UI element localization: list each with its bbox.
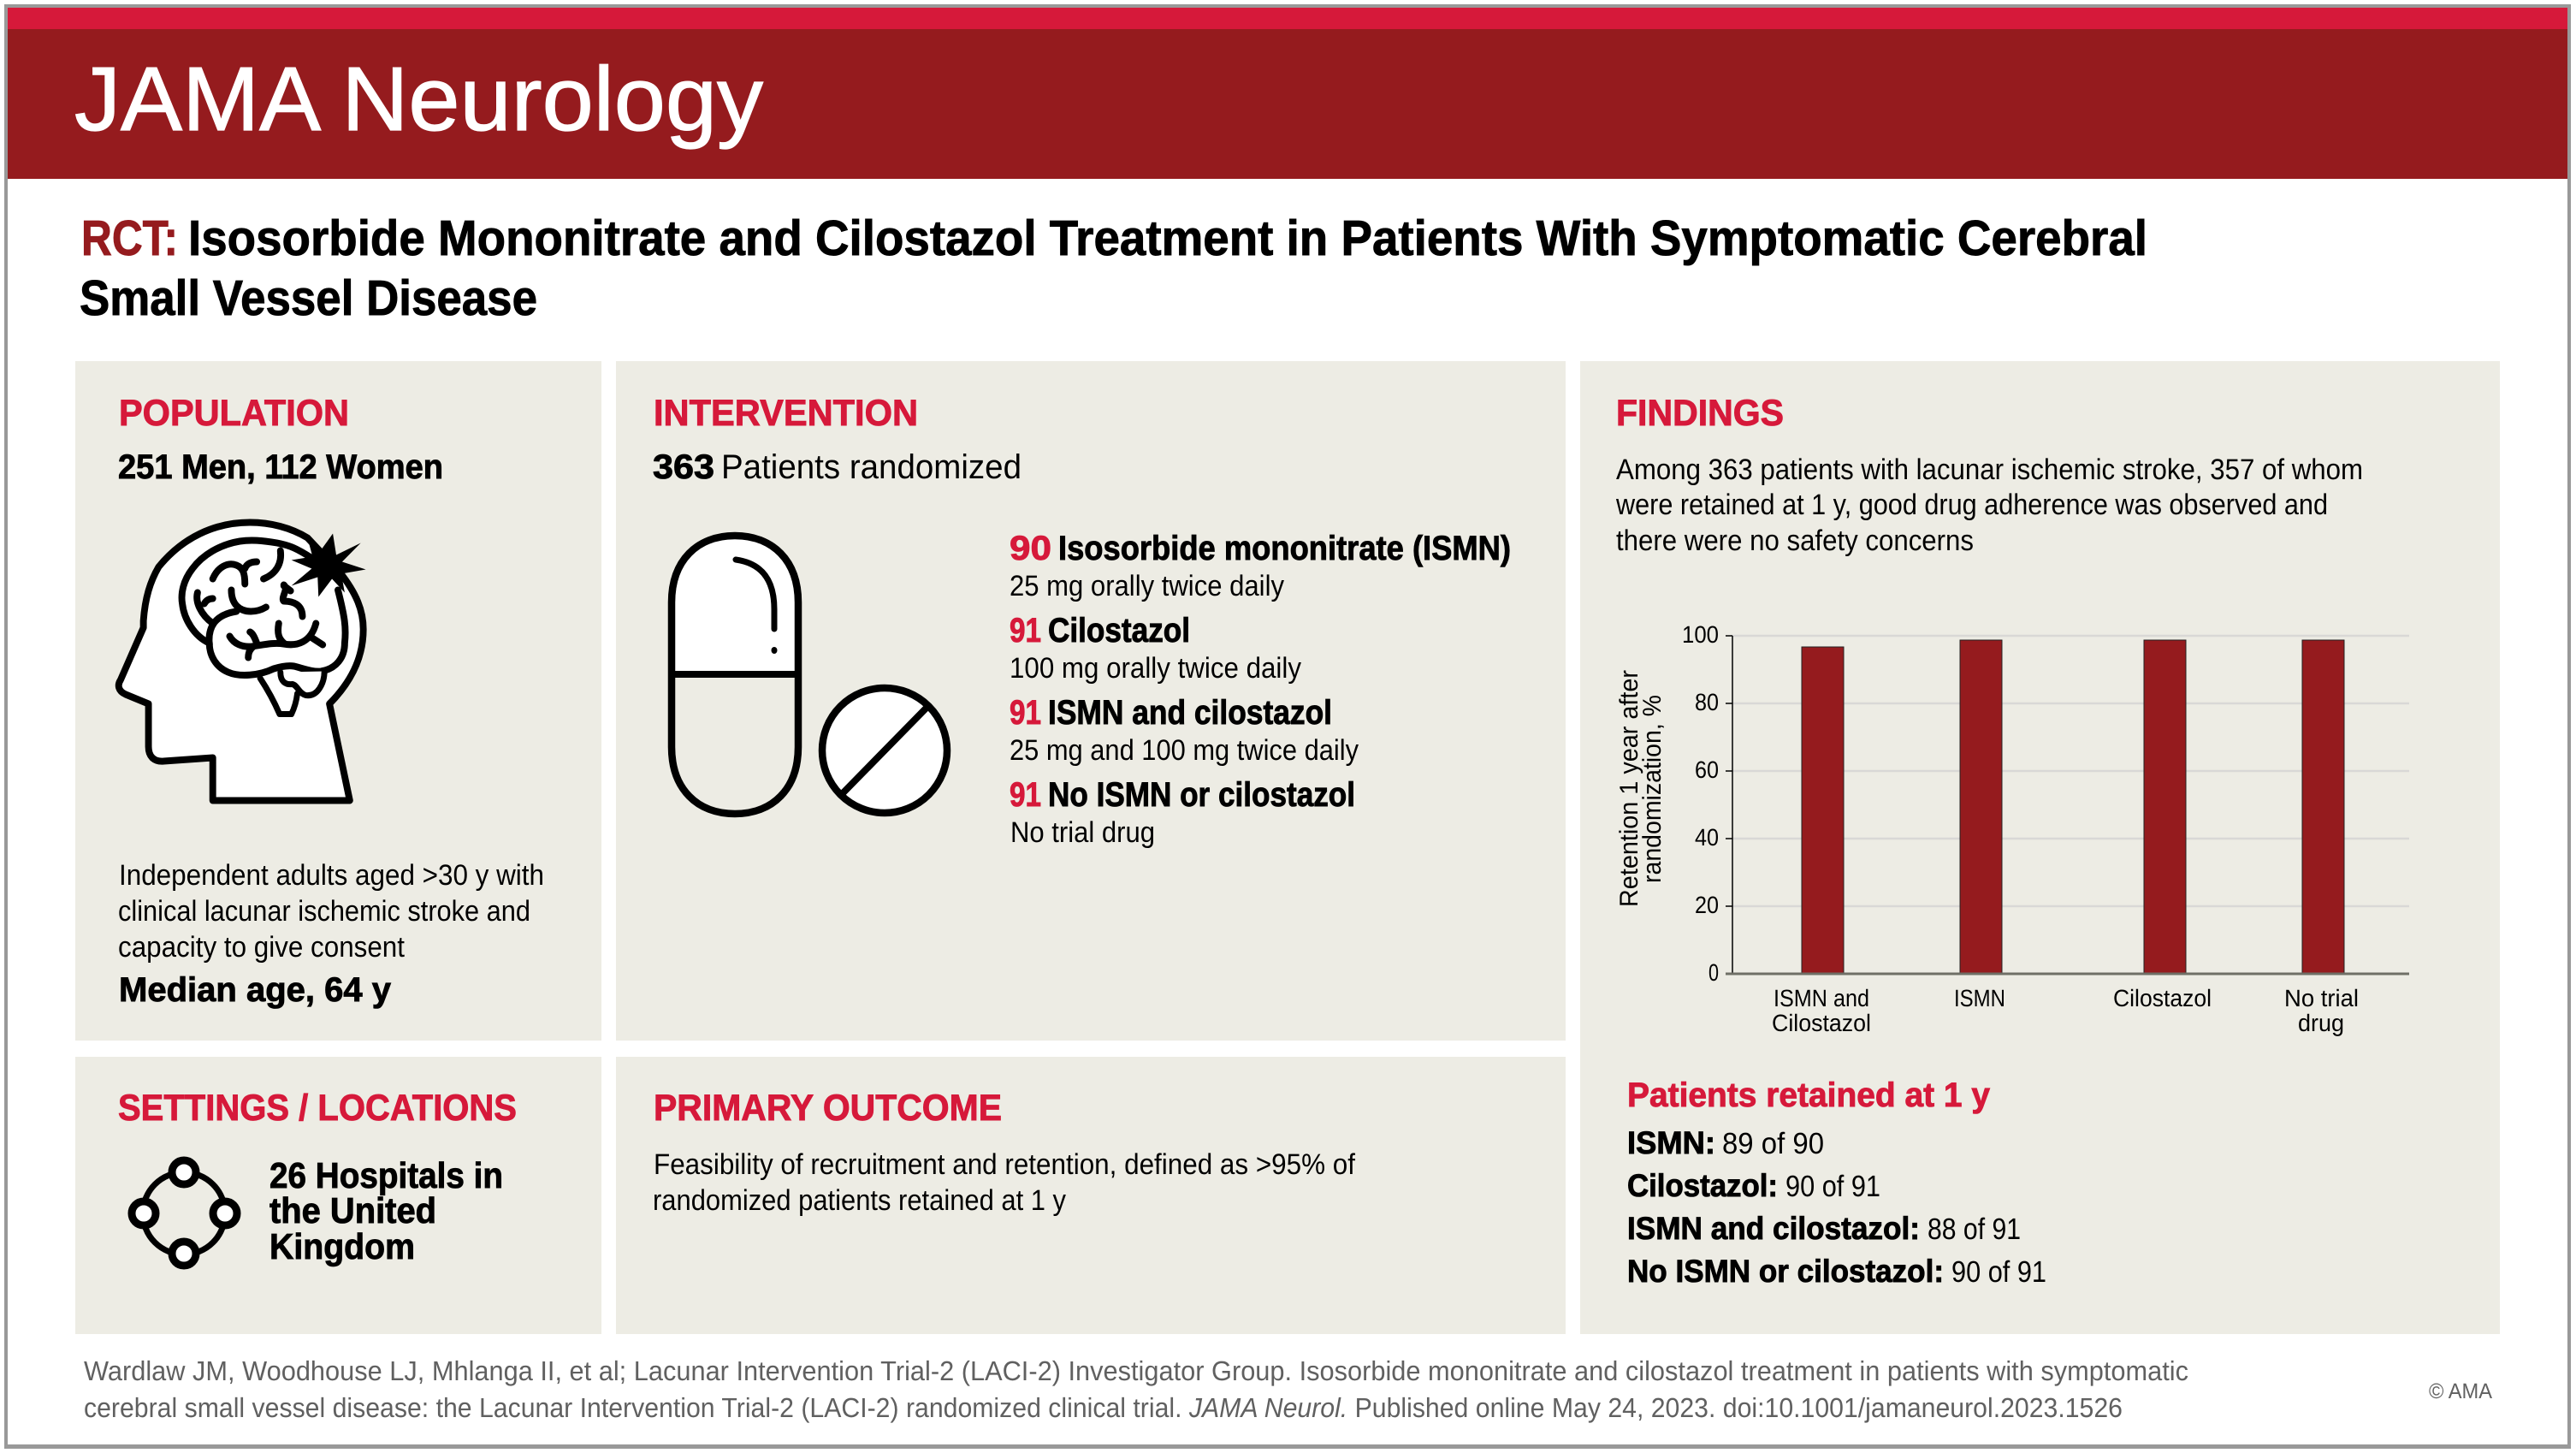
- population criteria: capacity to give consent: [118, 931, 405, 964]
- y axis title: Retention 1 year after: [1615, 670, 1643, 907]
- y axis ticks: 0: [1708, 959, 1719, 986]
- arm 3: ISMN and cilostazol: [1048, 694, 1332, 732]
- heading: primary outcome: PRIMARY OUTCOME: [654, 1088, 1002, 1129]
- x axis labels: No trial: [2284, 985, 2359, 1011]
- panel: settings and locations: [75, 1057, 601, 1334]
- y axis ticks: [1682, 621, 1719, 986]
- icon: network: [132, 1160, 237, 1266]
- y axis title: randomization, %: [1638, 695, 1667, 883]
- arm 4: 91: [1010, 776, 1041, 814]
- arm 1: Isosorbide mononitrate (ISMN): [1058, 530, 1511, 567]
- retained: ISMN and cilostazol: 88 of 91: [1928, 1213, 2021, 1246]
- arm 2: Cilostazol: [1048, 612, 1190, 649]
- heading: population: POPULATION: [119, 393, 349, 434]
- y axis ticks: 20: [1695, 892, 1719, 918]
- population criteria: clinical lacunar ischemic stroke and: [118, 895, 530, 928]
- arm 3: [1010, 694, 1359, 767]
- population criteria: Independent adults aged >30 y with: [119, 859, 544, 892]
- arm 2: [1010, 612, 1301, 685]
- randomized count: 363: [653, 448, 714, 486]
- citation: [84, 1355, 2188, 1423]
- header banner: [8, 8, 2567, 179]
- x axis labels: [1772, 985, 2359, 1036]
- findings text: there were no safety concerns: [1616, 525, 1974, 557]
- icon: burst: [292, 534, 366, 597]
- sex counts: 251 Men, 112 Women: [118, 448, 443, 486]
- retained: ISMN and cilostazol: ISMN and cilostazol:: [1627, 1211, 1920, 1246]
- title: Isosorbide Mononitrate and Cilostazol Treatment in Patients With Symptomatic Cerebral: [188, 211, 2147, 266]
- title: RCT:: [81, 211, 178, 266]
- icon: head with brain and stroke burst: [119, 522, 366, 801]
- median age: Median age, 64 y: [119, 971, 392, 1009]
- heading: findings: FINDINGS: [1616, 393, 1784, 434]
- arm 4: [1010, 776, 1355, 849]
- copyright: © AMA: [2429, 1379, 2492, 1403]
- journal name: JAMA Neurology: [74, 49, 763, 150]
- y axis ticks: 40: [1695, 824, 1719, 851]
- y axis ticks: 60: [1695, 756, 1719, 783]
- x axis labels: drug: [2298, 1010, 2344, 1036]
- title: [80, 211, 2147, 326]
- patients retained heading: Patients retained at 1 y: [1627, 1076, 1991, 1114]
- heading: intervention: INTERVENTION: [654, 393, 918, 434]
- hospitals text: the United: [269, 1190, 436, 1231]
- arm 2: 100 mg orally twice daily: [1010, 652, 1301, 685]
- retained: no ISMN or cilostazol: No ISMN or cilostazol:: [1627, 1254, 1944, 1289]
- findings text: were retained at 1 y, good drug adherence was observed and: [1615, 489, 2328, 521]
- x axis labels: Cilostazol: [2113, 985, 2212, 1011]
- y axis title: [1615, 670, 1667, 907]
- arm 2: 91: [1010, 612, 1041, 649]
- icon: tablet: [822, 688, 947, 813]
- hospitals text: 26 Hospitals in: [269, 1155, 503, 1195]
- arm 1: [1010, 530, 1511, 602]
- population criteria: [118, 859, 544, 964]
- outcome text: [653, 1148, 1356, 1217]
- retained: cilostazol: [1627, 1168, 1880, 1203]
- title: Small Vessel Disease: [80, 270, 537, 326]
- retained: cilostazol: Cilostazol:: [1627, 1168, 1778, 1203]
- outcome text: Feasibility of recruitment and retention, defined as >95% of: [654, 1148, 1356, 1181]
- panel: primary outcome: [616, 1057, 1566, 1334]
- panel: findings: [1580, 361, 2500, 1334]
- arm 1: 25 mg orally twice daily: [1010, 570, 1284, 602]
- bars: [1802, 640, 2344, 974]
- retained: ISMN: [1627, 1125, 1824, 1160]
- outcome text: randomized patients retained at 1 y: [653, 1184, 1066, 1217]
- hospitals text: Kingdom: [269, 1226, 415, 1266]
- icon: capsule: [672, 536, 798, 814]
- panel: population: [75, 361, 601, 1041]
- arm 4: No ISMN or cilostazol: [1048, 776, 1355, 814]
- arm 1: 90: [1010, 530, 1051, 567]
- findings text: Among 363 patients with lacunar ischemic stroke, 357 of whom: [1616, 454, 2363, 486]
- citation: cerebral small vessel disease: the Lacunar Intervention Trial-2 (LACI-2) randomized clinical trial. JAMA Neurol. Published online May 24, 2023. doi:10.1001/jamaneurol.2023.1526: [84, 1392, 2123, 1423]
- arm 3: 25 mg and 100 mg twice daily: [1010, 734, 1359, 767]
- retained: no ISMN or cilostazol: 90 of 91: [1951, 1255, 2046, 1289]
- panel: intervention: [616, 361, 1566, 1041]
- x axis labels: Cilostazol: [1772, 1010, 1871, 1036]
- randomized count: Patients randomized: [721, 448, 1022, 486]
- retained: ISMN: 89 of 90: [1722, 1127, 1824, 1160]
- x axis labels: ISMN and: [1774, 985, 1869, 1011]
- arm 3: 91: [1010, 694, 1041, 732]
- x axis labels: ISMN: [1954, 985, 2005, 1011]
- citation: Wardlaw JM, Woodhouse LJ, Mhlanga II, et al; Lacunar Intervention Trial-2 (LACI-2) Investigator Group. Isosorbide mononitrate and cilostazol treatment in patients with symptomatic: [84, 1355, 2188, 1386]
- heading: settings: SETTINGS / LOCATIONS: [118, 1088, 517, 1129]
- bar chart: retention: [1615, 621, 2409, 1036]
- arm 4: No trial drug: [1010, 816, 1155, 849]
- hospitals text: [269, 1155, 503, 1266]
- retained: cilostazol: 90 of 91: [1785, 1170, 1880, 1203]
- y axis ticks: 80: [1695, 689, 1719, 715]
- y axis ticks: 100: [1682, 621, 1719, 648]
- retained: ISMN: ISMN:: [1627, 1125, 1715, 1160]
- findings text: [1615, 454, 2363, 557]
